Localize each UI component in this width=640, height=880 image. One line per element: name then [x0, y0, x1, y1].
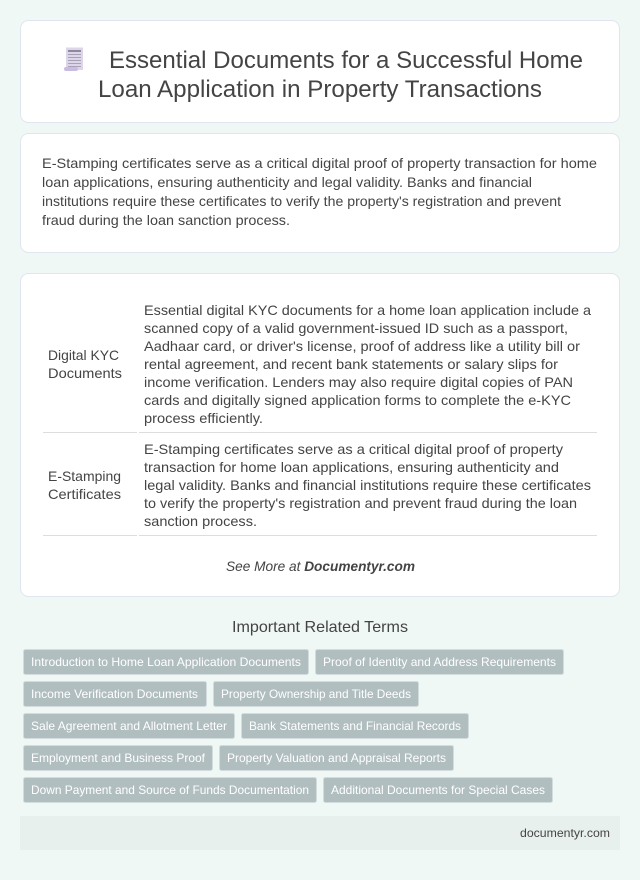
tag: Property Valuation and Appraisal Reports [227, 751, 446, 765]
tag [214, 682, 418, 706]
table row: E-Stamping Certificates [48, 441, 591, 529]
row text: Digital KYC description: Essential digital KYC documents for a home loan application include a [144, 302, 591, 318]
tag: Employment and Business Proof [31, 751, 206, 765]
tag [242, 714, 468, 738]
footer [20, 816, 620, 850]
text block: summary paragraph: institutions require these certificates to verify the property's registration and prevent [42, 193, 561, 209]
tag: Property Ownership and Title Deeds [221, 687, 411, 701]
icon: document scroll [64, 48, 83, 71]
tag list: related terms [24, 650, 564, 802]
row text: E-Stamping description: transaction for home loan applications, ensuring authenticity and [144, 459, 559, 475]
link: see more: See More at Documentyr.com [226, 558, 415, 574]
text block: summary paragraph [42, 155, 597, 228]
panel: title card [20, 20, 620, 122]
tag [316, 650, 564, 674]
panel: documents table [20, 274, 620, 596]
row text: E-Stamping description: legal validity. Banks and financial institutions require these certificates [144, 477, 591, 493]
row text: Digital KYC description: Aadhaar card, or driver's license, proof of address like a utility bill or [144, 338, 580, 354]
tag: Introduction to Home Loan Application Documents [31, 655, 301, 669]
row label: E-Stamping Certificates: Certificates [48, 486, 121, 502]
row text: Digital KYC description: cards and digitally signed application forms to complete the e-KYC [144, 392, 571, 408]
tag [24, 650, 308, 674]
heading: related terms: Important Related Terms [232, 619, 408, 636]
row text: E-Stamping description: to verify the property's registration and prevent fraud during the loan [144, 495, 577, 511]
footer: documentyr.com [520, 826, 610, 840]
row text: Digital KYC description: scanned copy of a valid government-issued ID such as a passport, [144, 320, 568, 336]
tag: Bank Statements and Financial Records [249, 719, 461, 733]
row text: E-Stamping description [144, 441, 591, 529]
tag [24, 714, 234, 738]
row text: Digital KYC description: process efficiently. [144, 410, 263, 426]
tag [220, 746, 454, 770]
row text: Digital KYC description: rental agreement, and recent bank statements or salary slips for [144, 356, 558, 372]
title: Loan Application in Property Transactions [98, 76, 542, 103]
text block: summary paragraph: E-Stamping certificates serve as a critical digital proof of property transaction for home [42, 155, 597, 171]
tag: Down Payment and Source of Funds Documentation [31, 783, 309, 797]
tag [24, 682, 206, 706]
text block: summary paragraph: fraud during the loan sanction process. [42, 212, 290, 228]
row text: E-Stamping description: E-Stamping certificates serve as a critical digital proof of property [144, 441, 563, 457]
table row: Digital KYC Documents [48, 302, 591, 426]
title: Essential Documents for a Successful Home [109, 47, 583, 74]
row text: E-Stamping description: sanction process. [144, 513, 257, 529]
tag [24, 778, 316, 802]
tag: Sale Agreement and Allotment Letter [31, 719, 227, 733]
row label: Digital KYC Documents: Documents [48, 365, 122, 381]
panel: summary [20, 134, 620, 252]
tag: Proof of Identity and Address Requirements [323, 655, 556, 669]
row label: Digital KYC Documents [48, 347, 122, 381]
text block: summary paragraph: loan applications, ensuring authenticity and legal validity. Banks and financial [42, 174, 532, 190]
row label: E-Stamping Certificates [48, 468, 121, 502]
tag: Additional Documents for Special Cases [331, 783, 545, 797]
title [98, 47, 583, 103]
row label: E-Stamping Certificates: E-Stamping [48, 468, 121, 484]
tag [324, 778, 552, 802]
row label: Digital KYC Documents: Digital KYC [48, 347, 119, 363]
tag: Income Verification Documents [31, 687, 198, 701]
row text: Digital KYC description [144, 302, 591, 426]
tag [24, 746, 212, 770]
row text: Digital KYC description: income verification. Lenders may also require digital copies of PAN [144, 374, 573, 390]
